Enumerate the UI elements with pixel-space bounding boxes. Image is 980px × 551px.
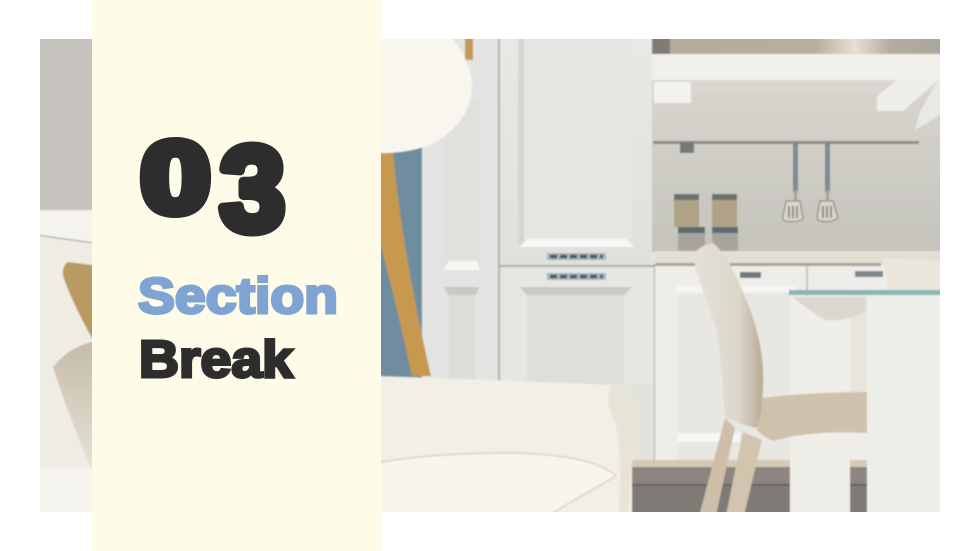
- utensil rail: [653, 141, 919, 153]
- range hood: [651, 39, 940, 130]
- lower cabinets: [654, 266, 887, 460]
- hanging utensils: [783, 142, 838, 222]
- sofa: [375, 376, 638, 520]
- blue wall: [381, 147, 423, 378]
- dining table: [789, 290, 949, 520]
- countertop: [654, 251, 950, 266]
- cabinet handles: [547, 253, 606, 280]
- section number: 0: [141, 122, 210, 234]
- section number: [141, 122, 285, 256]
- section number: 3: [220, 122, 285, 256]
- backsplash wall: [652, 90, 950, 252]
- storage jars: [674, 194, 738, 252]
- heading: Section: Section: [138, 268, 338, 324]
- table front panel: [866, 392, 940, 512]
- cream panel: [92, 0, 381, 551]
- floor: [631, 460, 868, 512]
- tall cabinets: [422, 30, 656, 460]
- lamp stand: [375, 30, 473, 376]
- heading: Break: Break: [139, 331, 293, 389]
- second chair back: [884, 266, 940, 290]
- lamp shade: [381, 39, 472, 154]
- left wall and sofa: [40, 39, 92, 512]
- dining chair: [693, 243, 868, 520]
